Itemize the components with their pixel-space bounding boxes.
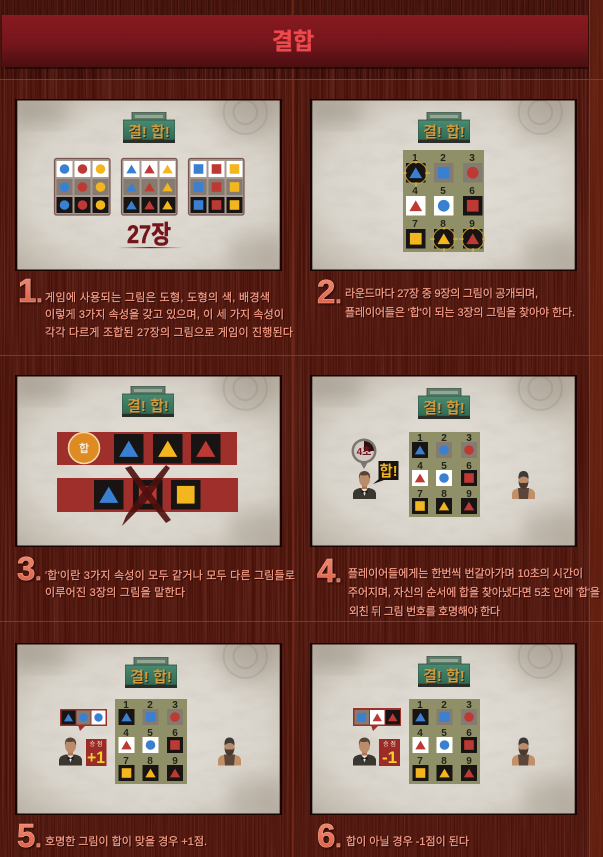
caption 1: 게임에 사용되는 그림은 도형, 도형의 색, 배경색 xyxy=(45,291,270,304)
logo: 결! 합! xyxy=(423,124,465,141)
timer: 4초 xyxy=(357,446,371,458)
27 cards label: 27장 xyxy=(127,221,171,249)
speech: called cards xyxy=(60,709,107,731)
player 2 xyxy=(218,738,241,766)
card board: 8 xyxy=(440,219,446,230)
card board: 3 xyxy=(469,153,475,164)
card board: 3 xyxy=(172,700,178,711)
timer xyxy=(352,438,376,469)
card board: 7 xyxy=(412,219,418,230)
card group: triangles xyxy=(122,158,177,215)
caption 4: 주어지며, 자신의 순서에 합을 찾아냈다면 5초 안에 '합'을 xyxy=(348,586,600,599)
speech: called cards xyxy=(353,708,401,731)
logo: 결! 합! xyxy=(423,668,465,685)
caption 1: 각각 다르게 조합된 27장의 그림으로 게임이 진행된다 xyxy=(45,326,293,339)
card board xyxy=(115,699,187,784)
caption 5 xyxy=(17,817,207,854)
card board: 8 xyxy=(147,756,153,767)
caption 3 xyxy=(17,550,295,599)
card board xyxy=(409,699,480,784)
card board: 6 xyxy=(466,461,472,472)
caption 1: 이렇게 3가지 속성을 갖고 있으며, 이 세 가지 속성이 xyxy=(45,308,284,321)
caption 4: 4. xyxy=(317,552,341,589)
score: minus one: -1 xyxy=(382,748,397,767)
card board: 6 xyxy=(466,728,472,739)
card board: 3 xyxy=(466,433,472,444)
card board xyxy=(409,432,480,517)
logo xyxy=(123,112,175,143)
card board: 7 xyxy=(123,756,129,767)
panel 1: 27 cards xyxy=(15,83,282,271)
card board: 1 xyxy=(417,433,423,444)
logo: 결! 합! xyxy=(127,398,169,415)
card board: 4 xyxy=(417,461,423,472)
cross mark xyxy=(122,465,171,526)
card board: 9 xyxy=(469,219,475,230)
caption 2 xyxy=(317,273,575,319)
card board: 3 xyxy=(466,700,472,711)
title: 결합 xyxy=(272,28,314,54)
caption 6: 6. xyxy=(317,817,341,854)
card board: 4 xyxy=(417,728,423,739)
score: plus one xyxy=(86,739,106,767)
card board: 5 xyxy=(147,728,153,739)
card board: 1 xyxy=(417,700,423,711)
panel 5: correct call xyxy=(15,627,282,815)
caption 5: 호명한 그림이 합이 맞을 경우 +1점. xyxy=(45,835,207,848)
caption 4: 플레이어들에게는 한번씩 번갈아가며 10초의 시간이 xyxy=(348,566,583,580)
logo xyxy=(125,657,177,688)
player 1 xyxy=(59,738,82,766)
logo xyxy=(418,388,470,419)
card board: 5 xyxy=(440,186,446,197)
card board: 5 xyxy=(441,461,447,472)
card board: 7 xyxy=(417,756,423,767)
card board: 7 xyxy=(417,489,423,500)
player 2 xyxy=(512,738,535,766)
card board: 8 xyxy=(441,756,447,767)
card board: 6 xyxy=(469,186,475,197)
caption 3: 3. xyxy=(17,550,41,587)
hap badge: 합 xyxy=(79,441,89,455)
caption 4: 외친 뒤 그림 번호를 호명해야 한다 xyxy=(349,604,500,618)
player 1 xyxy=(353,738,376,766)
card board: 4 xyxy=(123,728,129,739)
card board: 9 xyxy=(466,489,472,500)
logo xyxy=(418,112,470,143)
card board: 2 xyxy=(440,153,446,164)
valid set row xyxy=(57,432,237,465)
caption 1: 1. xyxy=(18,272,42,309)
player 1 xyxy=(353,471,376,499)
caption 5: 5. xyxy=(17,817,41,854)
card board: 2 xyxy=(441,700,447,711)
invalid set row xyxy=(57,478,238,512)
score: plus one: +1 xyxy=(87,748,105,767)
card board: 9 xyxy=(466,756,472,767)
card board: 5 xyxy=(441,728,447,739)
score: plus one: 승 점 xyxy=(90,741,102,748)
panel 4: turn timer xyxy=(310,359,577,547)
caption 6: 합이 아닐 경우 -1점이 된다 xyxy=(346,835,469,848)
card board: 4 xyxy=(412,186,418,197)
player 2 xyxy=(512,471,535,499)
caption 3: '합'이란 3가지 속성이 모두 같거나 모두 다른 그림들로 xyxy=(45,569,295,582)
caption 2: 라운드마다 27장 중 9장의 그림이 공개되며, xyxy=(345,287,538,300)
card board: 8 xyxy=(441,489,447,500)
logo: 결! 합! xyxy=(130,669,172,686)
caption 6 xyxy=(317,817,469,854)
card board: 1 xyxy=(123,700,129,711)
card board: 2 xyxy=(147,700,153,711)
caption 3: 이루어진 3장의 그림을 말한다 xyxy=(45,586,185,599)
hap badge xyxy=(68,432,100,464)
card board: 2 xyxy=(441,433,447,444)
logo xyxy=(122,386,174,417)
caption 4 xyxy=(317,552,600,618)
card group: squares xyxy=(188,158,244,215)
card board: 6 xyxy=(172,728,178,739)
card board: 1 xyxy=(412,153,418,164)
speech: hap: 합! xyxy=(380,463,398,480)
card board: 9 xyxy=(172,756,178,767)
logo xyxy=(418,656,470,687)
caption 2: 2. xyxy=(317,273,341,310)
caption 1 xyxy=(18,272,293,339)
card board xyxy=(402,150,487,253)
speech: hap xyxy=(373,461,398,484)
card group: circles xyxy=(54,158,110,215)
title banner xyxy=(2,15,588,69)
score: minus one: 승 점 xyxy=(383,741,396,748)
panel 2: nine cards xyxy=(310,83,577,271)
score: minus one xyxy=(379,739,400,767)
caption 2: 플레이어들은 '합'이 되는 3장의 그림을 찾아야 한다. xyxy=(345,306,575,319)
logo: 결! 합! xyxy=(423,400,465,417)
logo: 결! 합! xyxy=(128,124,170,141)
panel 6: wrong call xyxy=(310,627,577,815)
panel 3: set example xyxy=(15,359,282,547)
